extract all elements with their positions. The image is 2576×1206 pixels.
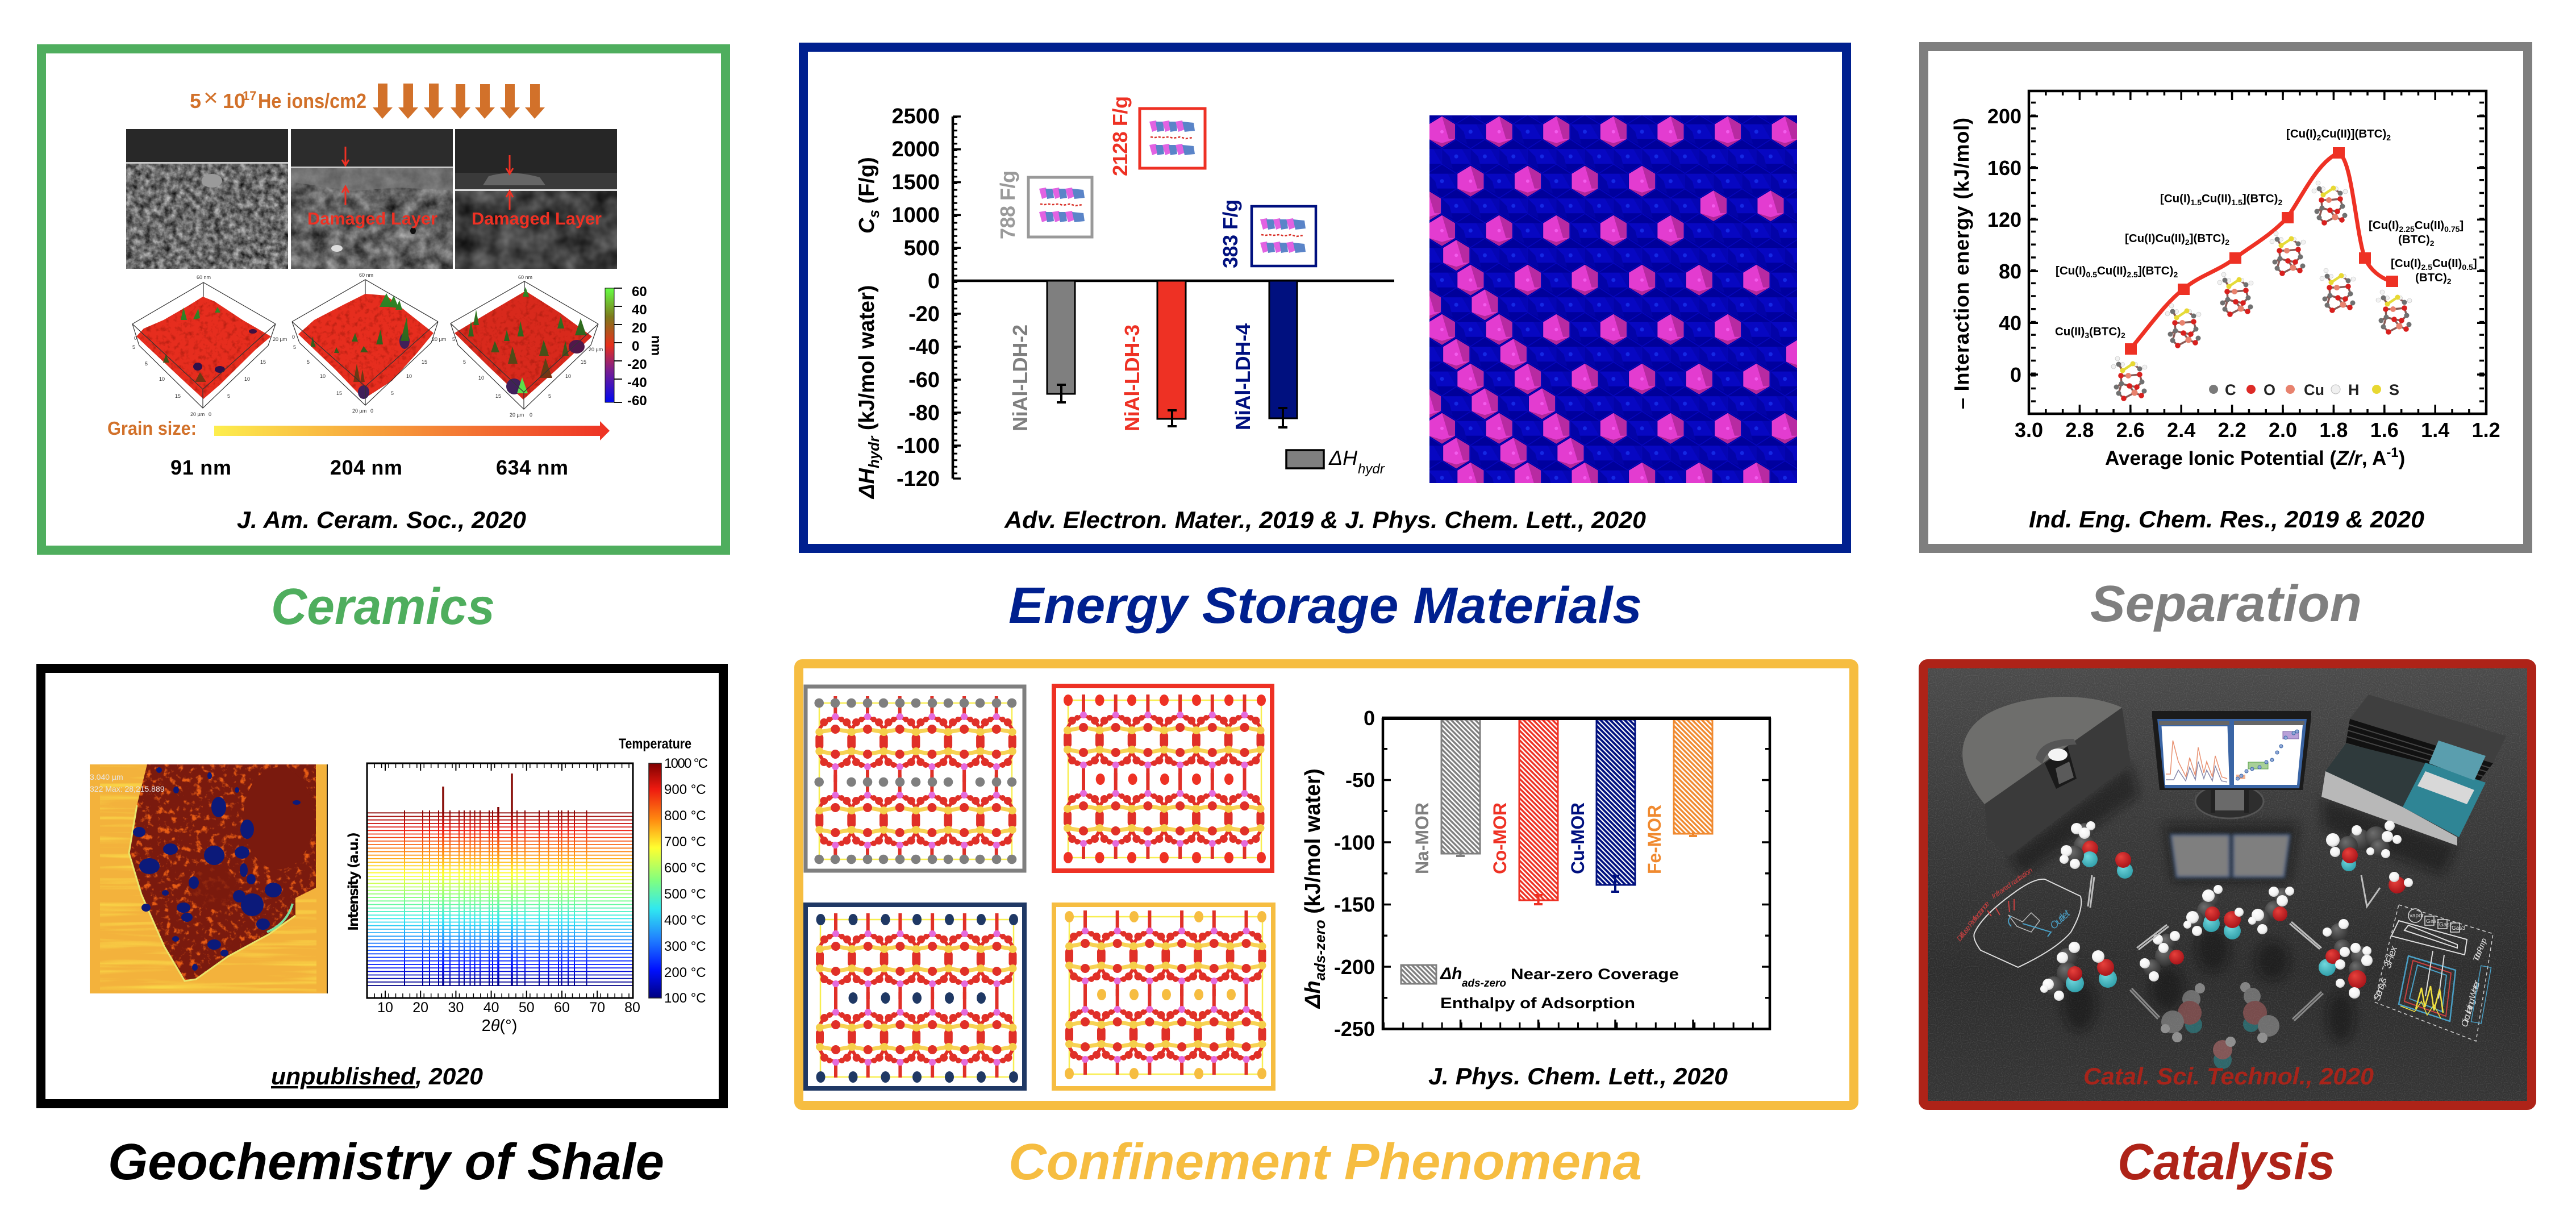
sketch: diffuse reflectance cell: Outlet [2048, 907, 2073, 931]
line chart: interaction energy: 3 [2085, 331, 2089, 340]
temperature colour bar: 800 °C [664, 808, 706, 824]
bar chart: capacitance and hydration enthalpy: ΔH [855, 467, 879, 500]
XRD waterfall chart: 50 [519, 1000, 535, 1016]
AFM surface 2: 5 [293, 344, 296, 350]
structure: Fe-MOR [1054, 905, 1273, 1088]
line chart: interaction energy: -1 [2386, 445, 2399, 460]
capacitance callout: 788 F/g: 788 F/g [996, 170, 1019, 239]
bar chart: adsorption enthalpy: Na-MOR [1412, 802, 1432, 874]
AFM surface 2: 0 [292, 334, 295, 340]
bar chart: capacitance and hydration enthalpy: C [855, 218, 879, 234]
XRD waterfall chart [345, 763, 640, 1035]
XRD waterfall chart: 40 [483, 1000, 499, 1016]
legend: atom types: S [2389, 381, 2399, 398]
height colour bar: 60 [632, 284, 647, 300]
line chart: interaction energy: 2 [2173, 270, 2178, 279]
panel: catalysis [1923, 664, 2532, 1105]
instrument: diffractometer [1962, 697, 2131, 856]
heading: Geochemistry of Shale: Geochemistry of Shale [108, 1134, 664, 1191]
panel: energy storage materials [803, 47, 1846, 548]
icon: ion beam arrows [373, 84, 545, 119]
AFM surface 2: 0 [370, 408, 373, 414]
bar chart: adsorption enthalpy: (kJ/mol water) [1301, 768, 1325, 920]
legend: near-zero coverage [1401, 964, 1679, 1012]
heading: Separation: Separation [2090, 576, 2362, 633]
line chart: interaction energy: 2.2 [2218, 418, 2246, 442]
line chart: interaction energy: 1.4 [2421, 418, 2449, 442]
grain size values: 91 nm [170, 456, 231, 479]
grain size label: Grain size: [107, 418, 197, 439]
structure: Na-MOR [806, 687, 1024, 871]
molecule: translucent transition states [2161, 982, 2279, 1069]
bar chart: adsorption enthalpy: Fe-MOR [1644, 805, 1665, 874]
molecule: adsorbed group upper right [2326, 821, 2413, 893]
line chart: interaction energy: 1.2 [2472, 418, 2500, 442]
sketch: gas sorption apparatus: vapor [2410, 913, 2424, 919]
molecular structure models [2111, 181, 2412, 401]
bar chart: capacitance and hydration enthalpy: -20 [908, 302, 940, 326]
bar chart: capacitance and hydration enthalpy: hydr [865, 435, 882, 468]
ion dose label: × [203, 84, 218, 111]
bar chart: capacitance and hydration enthalpy: 500 [904, 236, 940, 260]
AFM surface 1: 5 [227, 393, 230, 399]
AFM surface 1: 5 [132, 344, 135, 350]
line chart: interaction energy [1950, 91, 2500, 469]
capacitance callout: 788 F/g [996, 170, 1092, 239]
AFM surface 2 [292, 272, 446, 414]
sketch: diffuse reflectance cell [1955, 866, 2081, 967]
line chart: interaction energy: 2.25 [2399, 224, 2415, 234]
legend: delta H hydr: hydr [1358, 461, 1385, 477]
bar chart: capacitance and hydration enthalpy: (F/g) [855, 157, 879, 210]
bar chart: capacitance and hydration enthalpy: -40 [908, 335, 940, 359]
bar chart: capacitance and hydration enthalpy: 2000 [891, 138, 940, 161]
heading: Ceramics: Ceramics [271, 579, 495, 635]
bar chart: adsorption enthalpy: -200 [1334, 955, 1375, 979]
bar chart: adsorption enthalpy: Cu-MOR [1568, 802, 1588, 874]
temperature colour bar: 100 °C [664, 991, 706, 1006]
sketch: gas sorption apparatus: Turbo Pump [2471, 937, 2489, 963]
bar chart: adsorption enthalpy: 0 [1364, 706, 1375, 730]
capacitance callout: 2128 F/g: 2128 F/g [1108, 96, 1132, 176]
bar chart: capacitance and hydration enthalpy: 1000 [891, 203, 940, 227]
bar chart: adsorption enthalpy: -50 [1345, 768, 1375, 792]
sketch: gas sorption apparatus: Circulating Water [2460, 979, 2482, 1028]
bar chart: adsorption enthalpy: -250 [1334, 1017, 1375, 1041]
legend: atom types: Cu [2304, 381, 2324, 398]
damaged layer arrows and labels [307, 147, 602, 228]
capacitance callout: 383 F/g [1219, 199, 1316, 268]
line chart: interaction energy: 200 [1987, 105, 2021, 128]
temperature colour bar: 900 °C [664, 782, 706, 797]
sketch: gas sorption apparatus: Sensys [2371, 976, 2389, 1002]
AFM surface 2: 15 [422, 359, 427, 365]
line chart: interaction energy: 2 [2185, 238, 2190, 247]
line chart: interaction energy: ) [2399, 447, 2405, 469]
height colour bar [605, 284, 664, 409]
AFM surface 3: 5 [463, 359, 466, 365]
structure: Co-MOR [1054, 686, 1272, 871]
height colour bar: 20 [632, 321, 647, 336]
AFM surface 3 [451, 275, 603, 418]
line chart: interaction energy: ](BTC) [2190, 232, 2225, 245]
height colour bar: 40 [632, 302, 647, 318]
legend: near-zero coverage: Enthalpy of Adsorption [1440, 995, 1635, 1012]
heading: Confinement Phenomena: Confinement Phenomena [1008, 1134, 1642, 1191]
shadows on the floor [2009, 763, 2457, 1043]
AFM surface 1: 5 [145, 361, 148, 367]
line chart: interaction energy: 2 [2430, 239, 2435, 248]
structure: Cu-MOR [806, 905, 1024, 1088]
line chart: interaction energy: 2 [2278, 198, 2282, 207]
temperature colour bar: 700 °C [664, 834, 706, 850]
XRD waterfall chart: 80 [624, 1000, 640, 1016]
line chart: interaction energy: 1.5 [2231, 198, 2242, 207]
AFM surface 2: 20 µm [432, 336, 446, 342]
height colour bar: -40 [627, 375, 647, 390]
citation: J. Am. Ceram. Soc., 2020 [237, 506, 526, 533]
temperature colour bar: Temperature [619, 736, 691, 752]
grain size values [170, 456, 568, 479]
AFM surface 1: 10 [244, 376, 250, 382]
AFM surface 1: 0 [209, 411, 211, 417]
line chart: interaction energy: 80 [1999, 260, 2021, 283]
line chart: interaction energy: 1.5 [2191, 198, 2202, 207]
heading: Energy Storage Materials: Energy Storage Materials [1008, 577, 1642, 634]
molecule: left group [2040, 931, 2184, 1001]
legend: near-zero coverage: Near-zero Coverage [1511, 966, 1679, 983]
molecule: adsorbed group upper left [2060, 821, 2133, 879]
temperature colour bar: 400 °C [664, 913, 706, 928]
line chart: interaction energy: 1.8 [2319, 418, 2348, 442]
AFM surface 1: 0 [134, 335, 137, 341]
legend: near-zero coverage: Δh [1440, 964, 1462, 983]
arrows: reaction cycle [2088, 875, 2380, 1021]
XRD waterfall chart: 2θ(°) [482, 1017, 517, 1035]
AFM surface 3: 10 [565, 373, 571, 379]
line chart: interaction energy: 2.0 [2269, 418, 2297, 442]
AFM surface 1: 20 µm [273, 336, 287, 342]
AFM surface 1 [132, 275, 287, 417]
legend: delta H hydr [1286, 446, 1385, 477]
panel: confinement phenomena [799, 664, 1854, 1105]
line chart: interaction energy: (BTC) [2089, 325, 2121, 338]
line chart: interaction energy: 2 [2386, 133, 2391, 142]
panel: ceramics [41, 49, 726, 550]
sketch: diffuse reflectance cell: Infrared radiation [1990, 866, 2034, 900]
AFM surface 1: 20 µm [190, 411, 205, 417]
monitor reflection [2171, 835, 2290, 877]
SEM image: pristine [126, 129, 288, 269]
line chart: interaction energy: ](BTC) [2242, 192, 2278, 205]
AFM surface 3: 20 µm [589, 347, 603, 352]
height colour bar: nm [648, 335, 664, 356]
AFM surface 2: 60 nm [359, 272, 373, 278]
AFM surface 3: 60 nm [518, 275, 532, 280]
bar chart: capacitance and hydration enthalpy: s [865, 210, 882, 218]
bar chart: capacitance and hydration enthalpy: -100 [897, 434, 940, 458]
XRD waterfall chart: 60 [554, 1000, 570, 1016]
AFM surface 3: 20 µm [510, 412, 524, 418]
line chart: interaction energy: 2 [2121, 331, 2125, 340]
XRD waterfall chart: 10 [377, 1000, 393, 1016]
line chart: interaction energy: [Cu(I) [2286, 127, 2317, 140]
XRD waterfall chart: 70 [589, 1000, 605, 1016]
AFM surface 2: 10 [320, 373, 326, 379]
legend: atom types: H [2348, 381, 2359, 398]
line chart: interaction energy: 0 [2010, 363, 2021, 386]
citation: Ind. Eng. Chem. Res., 2019 & 2020 [2029, 506, 2424, 533]
temperature colour bar: 600 °C [664, 860, 706, 876]
ion dose label: 5 [190, 89, 201, 113]
XRD waterfall chart: 30 [448, 1000, 464, 1016]
ion dose label [190, 84, 366, 113]
bar chart: capacitance and hydration enthalpy: 0 [928, 269, 940, 293]
AFM surface 2: 20 µm [352, 408, 366, 414]
bar chart: capacitance and hydration enthalpy: NiAl-LDH-4 [1231, 323, 1254, 430]
panel: geochemistry of shale [41, 668, 723, 1104]
honeycomb structure image [1429, 115, 1797, 483]
sketch: gas sorption apparatus [2371, 905, 2493, 1041]
line chart: interaction energy: Cu(II) [2055, 325, 2085, 338]
molecule: right group [2319, 919, 2373, 999]
height colour bar: -60 [627, 393, 647, 409]
bar chart: adsorption enthalpy: Δh [1301, 980, 1325, 1009]
sketch: gas sorption apparatus: Gas1 [2426, 918, 2440, 925]
line chart: interaction energy: 3.0 [2015, 418, 2043, 442]
citation: J. Phys. Chem. Lett., 2020 [1428, 1063, 1728, 1089]
bar chart: adsorption enthalpy: -150 [1334, 893, 1375, 916]
line chart: interaction energy: [Cu(I) [2369, 219, 2399, 232]
line chart: interaction energy: 0.75 [2444, 224, 2460, 234]
AFM surface 1: 15 [260, 359, 266, 365]
bar chart: adsorption enthalpy: -100 [1334, 831, 1375, 854]
damaged layer arrows and labels: Damaged Layer [307, 209, 437, 228]
bar chart: adsorption enthalpy: ads-zero [1311, 920, 1328, 980]
line chart: interaction energy: ] [2460, 219, 2464, 232]
line chart: interaction energy: [Cu(I) [2056, 264, 2086, 277]
citation: Catal. Sci. Technol., 2020 [2083, 1063, 2374, 1089]
AFM surface 2: 5 [391, 390, 394, 396]
capacitance callout: 2128 F/g [1108, 96, 1205, 176]
line chart: interaction energy: ] [2473, 257, 2477, 270]
frame [1923, 664, 2532, 1105]
line chart: interaction energy: 40 [1999, 311, 2021, 335]
line chart: interaction energy: 2.4 [2167, 418, 2195, 442]
line chart: interaction energy: Cu(II)](BTC) [2321, 127, 2386, 140]
legend: atom types: O [2264, 381, 2275, 398]
shale map image: 3.040 µm [90, 772, 123, 781]
line chart: interaction energy: 2.6 [2116, 418, 2145, 442]
line chart: interaction energy: [Cu(I) [2160, 192, 2191, 205]
ion dose label: 10 [223, 89, 245, 113]
SEM image: irradiated large grain [455, 129, 617, 269]
line chart: interaction energy: 2 [2317, 133, 2321, 142]
XRD waterfall chart: Intensity (a.u.) [345, 832, 361, 931]
line chart: interaction energy: 0.5 [2086, 270, 2097, 279]
AFM surface 3: 0 [530, 412, 532, 418]
line chart: interaction energy: [Cu(I)Cu(II) [2125, 232, 2185, 245]
AFM surface 3: 5 [548, 393, 551, 399]
bar chart: capacitance and hydration enthalpy: NiAl-LDH-2 [1008, 325, 1032, 431]
line chart: interaction energy: (BTC) [2398, 233, 2430, 246]
temperature colour bar: 200 °C [664, 965, 706, 980]
line chart: interaction energy: – Interaction energy (kJ/mol) [1950, 118, 1973, 409]
sketch: gas sorption apparatus: Gas2 [2439, 922, 2453, 928]
bar chart: capacitance and hydration enthalpy: (kJ/mol water) [855, 285, 879, 436]
ion dose label: He ions/cm2 [258, 89, 366, 113]
bar chart: adsorption enthalpy: Co-MOR [1490, 802, 1510, 874]
arrow: grain size gradient [214, 421, 610, 440]
panel: separation [1924, 47, 2528, 548]
line chart: interaction energy: 120 [1987, 208, 2021, 231]
XRD waterfall chart: 20 [412, 1000, 428, 1016]
line chart: interaction energy: Cu(II) [2097, 264, 2127, 277]
SEM image: irradiated medium grain [291, 129, 453, 269]
bar chart: capacitance and hydration enthalpy [855, 105, 1394, 500]
temperature colour bar: 300 °C [664, 939, 706, 954]
capacitance callout: 383 F/g: 383 F/g [1219, 199, 1242, 268]
bar chart: adsorption enthalpy [1301, 706, 1771, 1041]
line chart: interaction energy: 2.5 [2127, 270, 2138, 279]
line chart: interaction energy: [Cu(I) [2391, 257, 2421, 270]
bar chart: capacitance and hydration enthalpy: 1500 [891, 170, 940, 194]
bar chart: capacitance and hydration enthalpy: -60 [908, 368, 940, 392]
shale map image [90, 764, 328, 993]
line chart: interaction energy: 0.5 [2462, 263, 2473, 272]
height colour bar: 0 [632, 339, 639, 354]
AFM surface 3: 15 [581, 359, 586, 365]
line chart: interaction energy: 1.6 [2370, 418, 2399, 442]
line chart: interaction energy: Cu(II) [2202, 192, 2231, 205]
legend: delta H hydr: ΔH [1328, 446, 1358, 469]
AFM surface 2: 10 [406, 373, 412, 379]
grain size values: 634 nm [496, 456, 568, 479]
line chart: interaction energy: (BTC) [2415, 271, 2447, 284]
bar chart: capacitance and hydration enthalpy: 2500 [891, 105, 940, 128]
legend: near-zero coverage: ads-zero [1462, 978, 1506, 989]
line chart: interaction energy: Cu(II) [2415, 219, 2444, 232]
legend: atom types [2209, 381, 2399, 398]
heading: Catalysis: Catalysis [2118, 1134, 2335, 1191]
line chart: interaction energy: ](BTC) [2138, 264, 2173, 277]
AFM surface 1: 60 nm [197, 275, 211, 280]
line chart: interaction energy: 2 [2225, 238, 2229, 247]
legend: atom types: C [2225, 381, 2236, 398]
sketch: gas sorption apparatus: Gas3 [2452, 925, 2465, 931]
temperature colour bar: 1000 °C [664, 756, 708, 771]
instrument: analyzer [2321, 695, 2506, 846]
AFM surface 2: 5 [307, 359, 310, 365]
AFM surface 1: 15 [175, 393, 181, 399]
AFM surface 3: 15 [495, 393, 501, 399]
bar chart: capacitance and hydration enthalpy: NiAl-LDH-3 [1120, 325, 1144, 431]
citation: unpublished, 2020 [271, 1063, 483, 1089]
temperature colour bar: 500 °C [664, 887, 706, 902]
line chart: interaction energy: 2.8 [2065, 418, 2094, 442]
line chart: interaction energy: Average Ionic Potential (Z/r, A [2105, 447, 2386, 469]
damaged layer arrows and labels: Damaged Layer [472, 209, 602, 228]
line chart: interaction energy: 2.5 [2421, 263, 2432, 272]
temperature colour bar [619, 736, 708, 1006]
AFM surface 1: 10 [159, 376, 165, 382]
citation: Adv. Electron. Mater., 2019 & J. Phys. Chem. Lett., 2020 [1004, 506, 1646, 533]
AFM surface 3: 5 [452, 336, 455, 342]
sketch: diffuse reflectance cell: Diffuse Reflectance [1955, 900, 1991, 943]
line chart: interaction energy: 160 [1987, 156, 2021, 180]
instrument: monitor with spectra [2152, 711, 2311, 818]
sketch: gas sorption apparatus: 3Flex [2382, 944, 2399, 970]
AFM surface 2: 15 [336, 390, 342, 396]
bar chart: capacitance and hydration enthalpy: -80 [908, 401, 940, 425]
shale map image: 322 Max: 28,215.889 [90, 784, 165, 793]
ion dose label: 17 [243, 89, 256, 103]
line chart: interaction energy: 2 [2447, 277, 2452, 286]
molecule: centre pair [2183, 885, 2294, 939]
bar chart: capacitance and hydration enthalpy: -120 [897, 467, 940, 491]
line chart: interaction energy: Cu(II) [2432, 257, 2462, 270]
grain size values: 204 nm [330, 456, 402, 479]
height colour bar: -20 [627, 357, 647, 372]
AFM surface 3: 10 [478, 375, 484, 381]
